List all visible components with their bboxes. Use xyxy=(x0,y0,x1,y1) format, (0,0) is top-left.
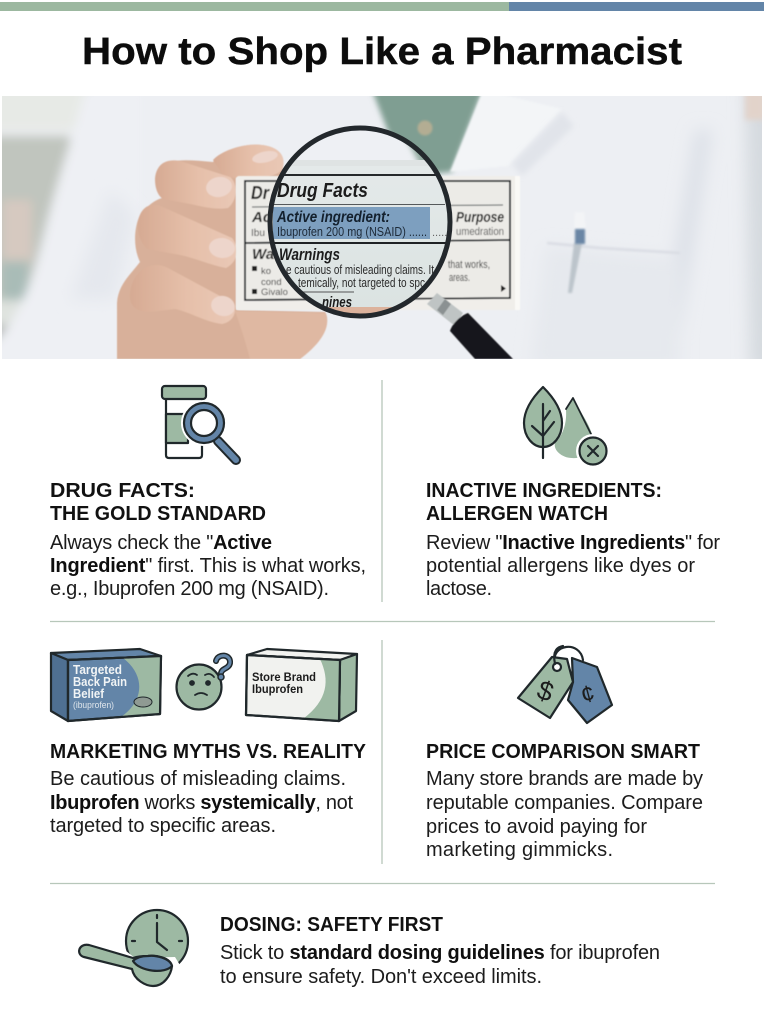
body text: targeted to specific areas. xyxy=(50,815,276,837)
medicine box with drug facts label: ko xyxy=(261,266,271,277)
body text: Many store brands are made by xyxy=(426,768,703,790)
magnifier lens with enlarged label: nines xyxy=(322,294,352,311)
body text: Stick to standard dosing guidelines for ibuprofen xyxy=(220,942,660,964)
top color bar xyxy=(0,2,764,11)
body text: Review "Inactive Ingredients" for xyxy=(426,532,720,554)
icon: store brand box xyxy=(246,649,357,721)
icon: clock and spoon xyxy=(79,910,188,990)
medicine box with drug facts label: Ibu xyxy=(251,228,265,239)
icon: leaf and drop xyxy=(524,387,610,468)
medicine box with drug facts label: that works, xyxy=(448,259,490,271)
magnifier lens with enlarged label: e cautious of misleading claims. It xyxy=(286,262,434,277)
heading: DRUG FACTS: xyxy=(50,480,195,502)
body text: Ingredient" first. This is what works, xyxy=(50,555,366,577)
body text: to ensure safety. Don't exceed limits. xyxy=(220,966,542,988)
medicine box with drug facts label: Ac xyxy=(251,209,272,226)
body text: potential allergens like dyes or xyxy=(426,555,695,577)
icon: targeted relief box: Back Pain xyxy=(73,675,127,689)
medicine box with drug facts label: Givalo xyxy=(261,287,288,298)
panel: drug facts xyxy=(50,386,366,600)
photo: pharmacist holding box under magnifying glass xyxy=(0,80,764,370)
magnifier handle xyxy=(427,293,513,359)
panel: dosing xyxy=(79,910,660,990)
magnifier lens with enlarged label: Ibuprofen 200 mg (NSAID) ...... xyxy=(277,225,427,239)
icon: confused face with question mark xyxy=(176,656,230,710)
icon: store brand box: Store Brand xyxy=(252,670,316,684)
body text: reputable companies. Compare xyxy=(426,792,703,814)
medicine box with drug facts label: areas. xyxy=(449,272,470,284)
body text: e.g., Ibuprofen 200 mg (NSAID). xyxy=(50,578,329,600)
body text: Ibuprofen works systemically, not xyxy=(50,792,353,814)
magnifier lens with enlarged label: Drug Facts xyxy=(277,180,368,202)
panel: marketing myths xyxy=(50,649,367,837)
medicine box with drug facts label: Dr xyxy=(251,183,270,203)
heading: DOSING: SAFETY FIRST xyxy=(220,914,443,936)
icon: store brand box: Ibuprofen xyxy=(252,682,303,696)
panel: price comparison xyxy=(426,646,703,861)
icon: price tags: $ xyxy=(533,674,558,708)
icon: price tags: ¢ xyxy=(578,680,598,709)
body text xyxy=(220,942,660,988)
heading: PRICE COMPARISON SMART xyxy=(426,741,700,763)
icon: targeted relief box xyxy=(51,649,161,721)
heading: MARKETING MYTHS VS. REALITY xyxy=(50,741,367,763)
icon: pill bottle with magnifier xyxy=(162,386,236,460)
icon: targeted relief box: Targeted xyxy=(73,663,122,677)
icon: targeted relief box: (ibuprofen) xyxy=(73,700,114,710)
heading: ALLERGEN WATCH xyxy=(426,503,608,525)
magnifier lens with enlarged label: Active ingredient: xyxy=(276,209,390,226)
body text xyxy=(50,768,353,837)
magnifier lens with enlarged label: ..... xyxy=(432,227,447,239)
fingers xyxy=(213,145,284,178)
medicine box with drug facts label: Purpose xyxy=(456,209,504,226)
heading: THE GOLD STANDARD xyxy=(50,503,266,525)
body text: Be cautious of misleading claims. xyxy=(50,768,346,790)
body text: lactose. xyxy=(426,578,492,600)
body text xyxy=(426,532,720,600)
magnifier lens with enlarged label xyxy=(262,125,462,319)
heading xyxy=(50,480,266,525)
dividers xyxy=(50,380,715,884)
magnifier lens with enlarged label: temically, not targeted to spc xyxy=(298,275,425,290)
body text xyxy=(50,532,366,600)
body text: prices to avoid paying for xyxy=(426,816,647,838)
panel: inactive ingredients xyxy=(426,387,720,600)
hand xyxy=(117,145,327,359)
fingernails xyxy=(204,149,279,319)
medicine box with drug facts label: Wa xyxy=(252,246,274,263)
icon: targeted relief box: Belief xyxy=(73,687,105,701)
medicine box with drug facts label xyxy=(236,176,520,310)
title: How to Shop Like a Pharmacist xyxy=(82,31,682,73)
medicine box with drug facts label: cond xyxy=(261,277,282,288)
body text xyxy=(426,768,703,861)
body text: Always check the "Active xyxy=(50,532,272,554)
magnifier lens with enlarged label: Warnings xyxy=(279,245,340,264)
heading xyxy=(426,480,662,525)
photo background and lab coat xyxy=(0,80,764,370)
body text: marketing gimmicks. xyxy=(426,839,613,861)
medicine box with drug facts label: umedration xyxy=(456,226,504,238)
heading: INACTIVE INGREDIENTS: xyxy=(426,480,662,502)
icon: price tags xyxy=(518,646,612,723)
